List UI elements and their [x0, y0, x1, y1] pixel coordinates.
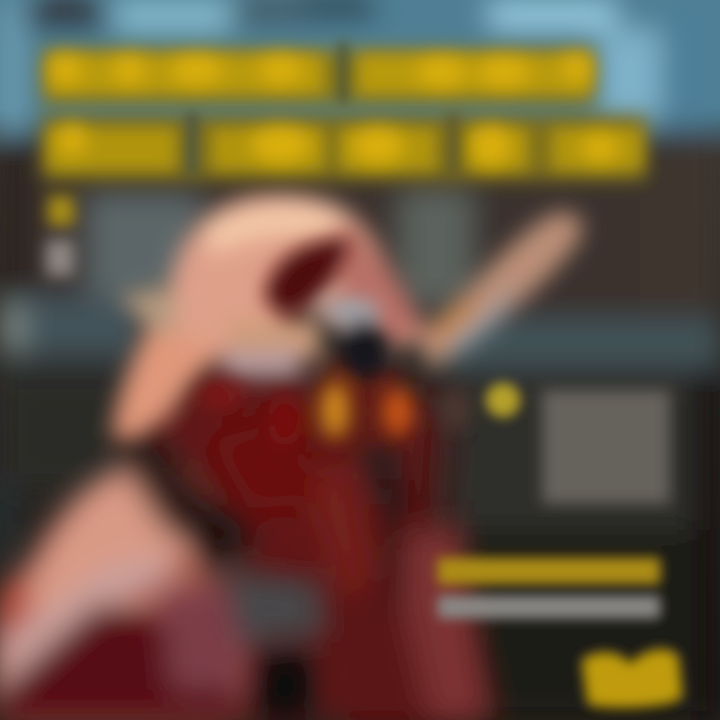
title line 2: illegible blurred yellow heading [42, 112, 646, 180]
turkey photograph (blurred) [0, 194, 582, 720]
logo badge: yellow [582, 650, 682, 707]
yellow callout line: illegible [438, 558, 660, 584]
right bullet marker [486, 383, 520, 417]
left bullet marker [46, 196, 74, 276]
title line 1: illegible blurred yellow heading [42, 42, 594, 104]
grey callout line: illegible [438, 596, 660, 618]
right text block: illegible [542, 390, 670, 504]
